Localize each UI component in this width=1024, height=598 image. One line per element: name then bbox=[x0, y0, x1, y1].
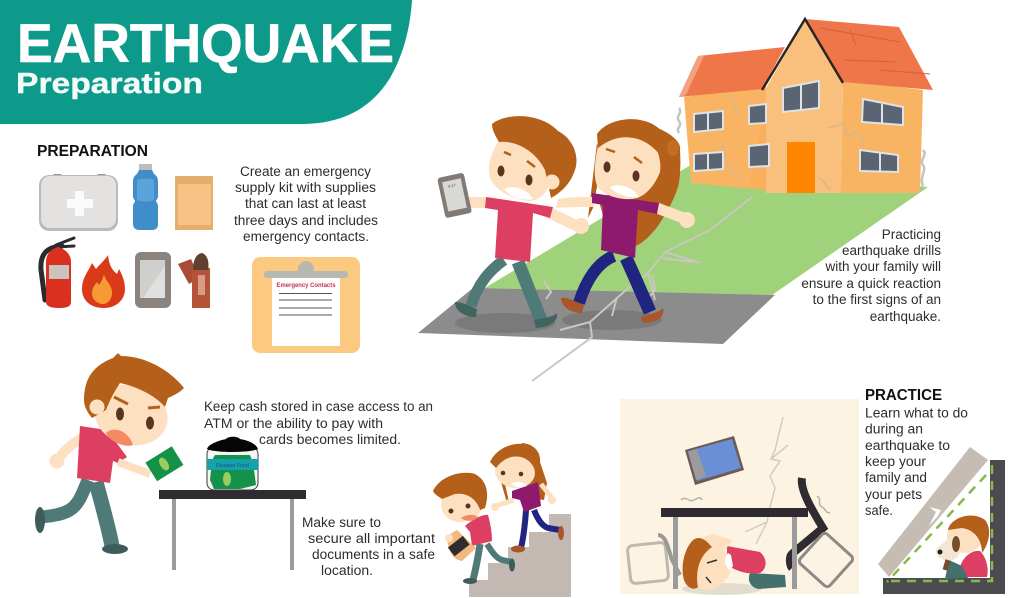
text: supply kit: three days and includes bbox=[234, 213, 378, 228]
back leg bbox=[42, 480, 88, 517]
text: drills: with your family will bbox=[824, 259, 941, 274]
icon: phone bbox=[135, 252, 171, 308]
falling picture bbox=[685, 436, 744, 485]
text: drills bbox=[801, 227, 941, 324]
stairs bbox=[469, 514, 571, 597]
jar: disaster fund bbox=[207, 437, 258, 490]
arm to cash bbox=[118, 462, 150, 474]
shirt bbox=[592, 193, 659, 258]
house bbox=[679, 19, 933, 193]
heading: preparation: PREPARATION bbox=[37, 143, 148, 160]
text: practice bbox=[865, 406, 968, 518]
text: practice: earthquake to bbox=[865, 438, 950, 453]
shoes bbox=[561, 298, 584, 313]
text: keep cash: cards becomes limited. bbox=[259, 432, 401, 447]
text: secure documents: documents in a safe bbox=[312, 547, 435, 562]
back hair bbox=[600, 125, 680, 246]
text: practice: Learn what to do bbox=[865, 406, 968, 420]
illustration: shaking house and grass path bbox=[483, 19, 933, 295]
hair bbox=[84, 353, 184, 418]
hair bbox=[492, 116, 576, 198]
right arm bbox=[657, 208, 686, 219]
eyes and mouth bbox=[448, 508, 454, 514]
right arm bbox=[548, 212, 581, 228]
shake lines bbox=[678, 108, 925, 186]
boy and dog bbox=[936, 515, 989, 579]
title: EARTHQUAKE: EARTHQUAKE bbox=[17, 12, 394, 74]
wall cracks bbox=[722, 95, 864, 190]
right chair bbox=[790, 478, 854, 588]
table bbox=[661, 508, 808, 589]
eyes and mouth bbox=[604, 162, 610, 172]
text: drills: ensure a quick reaction bbox=[801, 276, 941, 291]
text: practice: during an bbox=[865, 422, 923, 436]
cash bbox=[145, 446, 183, 481]
phone: 9:17 bbox=[448, 182, 457, 189]
illustration: triangle of life with boy and dog bbox=[878, 447, 1005, 594]
document bag bbox=[447, 530, 476, 561]
front leg bbox=[96, 482, 112, 546]
left strand bbox=[588, 143, 602, 218]
text: practice: your pets bbox=[865, 487, 922, 502]
figure: girl walking bbox=[556, 119, 695, 323]
panel: under the table bbox=[620, 399, 859, 595]
hair bbox=[433, 473, 487, 510]
back arm bbox=[58, 436, 86, 460]
shoes bbox=[455, 302, 477, 317]
boy on stairs bbox=[433, 473, 515, 584]
door bbox=[787, 142, 815, 193]
icon: fire extinguisher bbox=[41, 238, 74, 308]
illustration: stairs with family bbox=[433, 443, 571, 597]
text: supply kit: Create an emergency bbox=[240, 164, 371, 179]
walls bbox=[883, 460, 1005, 594]
safe zone dashes bbox=[885, 465, 992, 582]
road bbox=[418, 288, 775, 344]
icon: flashlight bbox=[178, 253, 210, 308]
text: drills: Practicing bbox=[882, 227, 941, 242]
icon: food packet bbox=[175, 176, 213, 230]
ear bbox=[90, 400, 104, 414]
top hair bbox=[597, 119, 667, 155]
text: drills: earthquake drills bbox=[842, 243, 941, 258]
person taking cover bbox=[682, 534, 786, 595]
grass lawn bbox=[483, 166, 928, 295]
legs bbox=[473, 544, 480, 580]
left leg bbox=[471, 260, 504, 306]
shirt bbox=[512, 482, 541, 512]
text: secure documents: secure all important bbox=[308, 531, 435, 546]
text: supply kit: emergency contacts. bbox=[243, 229, 369, 244]
legs bbox=[521, 510, 526, 548]
icon: water bottle bbox=[133, 164, 158, 230]
windows bbox=[694, 81, 903, 172]
right leg bbox=[626, 258, 650, 312]
hair bun highlight bbox=[667, 140, 679, 156]
face bbox=[87, 376, 175, 454]
face bbox=[595, 137, 660, 199]
face and hair bbox=[493, 453, 537, 491]
text: secure documents: Make sure to bbox=[302, 515, 381, 530]
figure: boy holding phone bbox=[437, 116, 589, 328]
title banner bbox=[0, 0, 412, 124]
icon: clipboard with emergency contacts: Emergency Contacts bbox=[276, 283, 336, 289]
heading: practice: PRACTICE bbox=[865, 387, 942, 404]
icon: first aid kit bbox=[39, 174, 118, 231]
text: keep cash: ATM or the ability to pay with bbox=[204, 416, 383, 431]
figure: boy running with cash bbox=[35, 353, 184, 554]
face bbox=[438, 483, 486, 525]
right leg bbox=[518, 262, 541, 320]
shirt bbox=[465, 515, 492, 546]
shake marks bbox=[681, 496, 830, 513]
icon: clipboard with emergency contacts bbox=[252, 257, 360, 353]
figure shadows bbox=[455, 310, 662, 333]
eyes and mouth bbox=[116, 408, 124, 420]
left arm bbox=[556, 197, 594, 208]
phone bbox=[437, 173, 472, 218]
left arm bbox=[466, 197, 488, 208]
text: keep cash: Keep cash stored in case access to an bbox=[204, 399, 433, 414]
text: practice: keep your bbox=[865, 454, 927, 469]
shoes bbox=[35, 507, 45, 533]
table with jar bbox=[159, 437, 306, 570]
text: drills: to the first signs of an bbox=[813, 292, 941, 307]
road crack bbox=[532, 197, 752, 381]
left chair bbox=[627, 535, 680, 584]
girl on stairs bbox=[490, 443, 564, 552]
text: secure documents bbox=[302, 515, 435, 578]
arms bbox=[495, 500, 514, 506]
text: supply kit: that can last at least bbox=[245, 196, 366, 211]
jar: disaster fund: Disaster Fund bbox=[216, 463, 249, 469]
ear bbox=[544, 174, 560, 190]
eyes and mouth bbox=[498, 166, 504, 176]
text: supply kit: supply kit with supplies bbox=[235, 180, 376, 195]
subtitle: Preparation: Preparation bbox=[16, 68, 203, 100]
wall crack bbox=[745, 417, 788, 544]
face bbox=[489, 139, 552, 201]
left leg bbox=[579, 256, 614, 303]
icon: flame bbox=[82, 255, 125, 308]
text: secure documents: location. bbox=[321, 563, 373, 578]
shirt bbox=[485, 197, 553, 262]
text: keep cash bbox=[204, 399, 433, 447]
text: practice: safe. bbox=[865, 503, 893, 518]
shirt bbox=[77, 426, 127, 483]
text: supply kit bbox=[234, 164, 378, 244]
board bbox=[878, 447, 988, 577]
text: drills: earthquake. bbox=[870, 309, 941, 324]
text: practice: family and bbox=[865, 470, 927, 485]
back hair bbox=[515, 443, 547, 500]
